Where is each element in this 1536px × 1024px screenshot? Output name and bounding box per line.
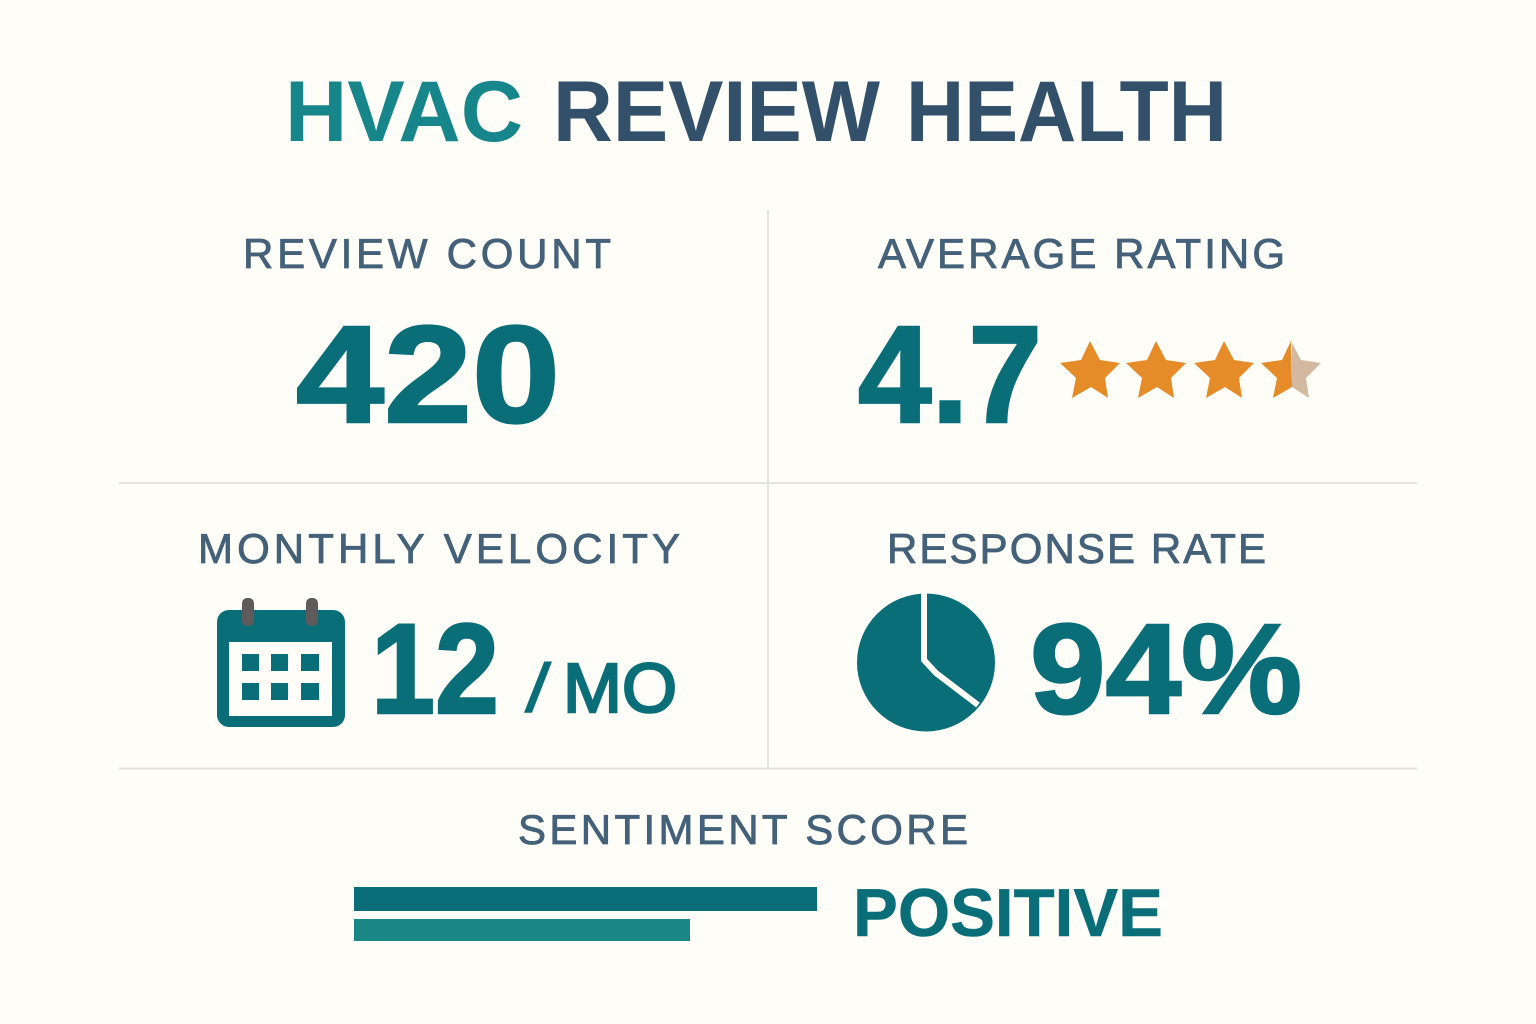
icon: calendar	[217, 598, 345, 727]
bar: primary	[354, 887, 817, 911]
label: monthly velocity: MONTHLY VELOCITY	[198, 525, 680, 572]
value: 4.7: 4.7	[858, 298, 1042, 452]
title: HEALTH	[906, 64, 1227, 160]
unit: per month: /	[524, 649, 553, 727]
value: 420: 420	[296, 298, 560, 452]
panel: response rate	[857, 525, 1302, 741]
icon: pie chart	[857, 590, 995, 732]
value: 12: 12	[371, 598, 499, 741]
panel: monthly velocity	[198, 525, 680, 741]
unit: per month: MO	[563, 649, 677, 727]
label: average rating: AVERAGE RATING	[878, 230, 1285, 277]
label: review count: REVIEW COUNT	[243, 230, 611, 277]
panel: sentiment score	[354, 806, 1163, 951]
bar: secondary	[354, 919, 690, 941]
panel: average rating	[858, 230, 1321, 452]
label: response rate: RESPONSE RATE	[887, 525, 1266, 572]
title: HVAC	[285, 64, 523, 160]
label: sentiment score: SENTIMENT SCORE	[518, 806, 968, 853]
title	[285, 64, 1227, 160]
title: REVIEW	[553, 64, 881, 160]
icon: rating stars	[1060, 341, 1321, 398]
panel: review count	[243, 230, 611, 452]
value: positive: POSITIVE	[853, 875, 1163, 951]
value: 94%: 94%	[1030, 598, 1302, 741]
